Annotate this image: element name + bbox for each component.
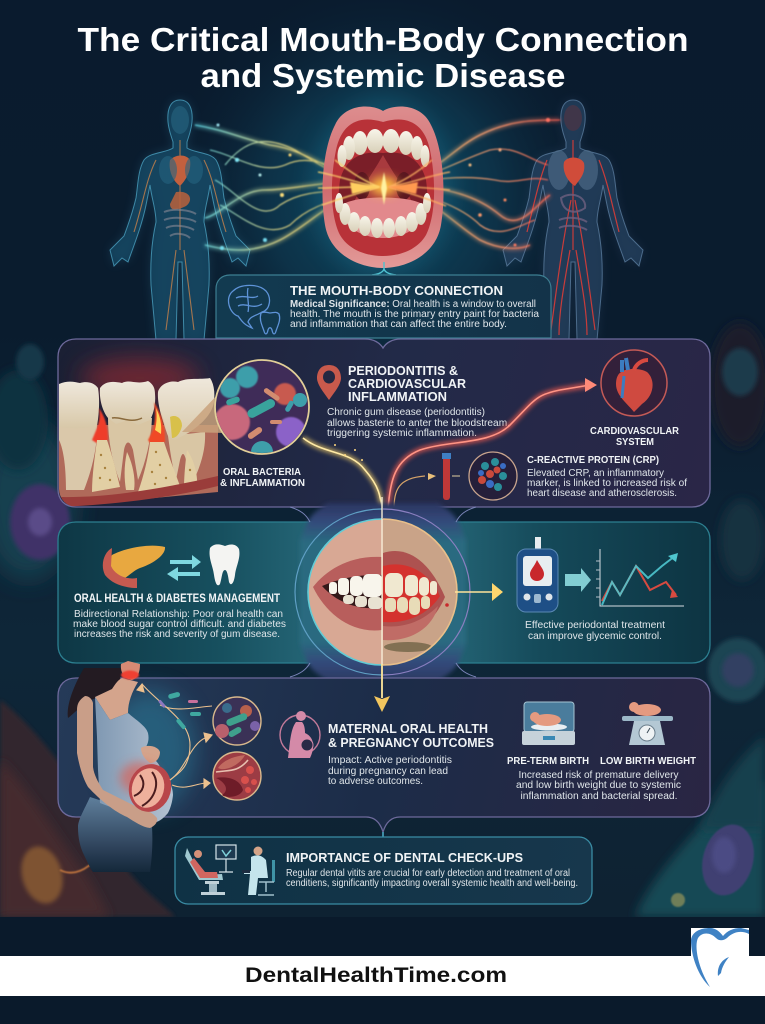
outcome text: Increased risk of premature delivery bbox=[518, 770, 678, 781]
outcome labels bbox=[507, 755, 697, 767]
label: oral bacteria: & INFLAMMATION bbox=[220, 477, 305, 489]
bone bbox=[92, 440, 197, 492]
teal arrow bbox=[565, 568, 591, 592]
outcome text: and low birth weight due to systemic bbox=[516, 780, 681, 791]
body text: Bidirectional Relationship: Poor oral health can bbox=[74, 609, 283, 620]
body text bbox=[327, 407, 510, 439]
label: oral bacteria: ORAL BACTERIA bbox=[223, 466, 301, 478]
body text bbox=[73, 609, 286, 640]
label: cardiovascular system: CARDIOVASCULAR bbox=[590, 425, 679, 437]
body text: make blood sugar control difficult. and diabetes bbox=[73, 619, 286, 630]
left lips bbox=[313, 557, 382, 630]
outcome labels: PRE-TERM BIRTH bbox=[507, 755, 589, 767]
connector: circle to glycemic panel arrow bbox=[455, 583, 503, 601]
CRP body text bbox=[527, 468, 687, 499]
label: cardiovascular system: SYSTEM bbox=[616, 436, 654, 448]
body text: cenditiens, significantly impacting overall systemic health and well-being. bbox=[286, 878, 578, 889]
location pin icon bbox=[317, 365, 341, 400]
footer text: DentalHealthTime.com bbox=[245, 964, 507, 987]
body text bbox=[525, 620, 665, 642]
heading: MATERNAL ORAL HEALTH bbox=[328, 722, 488, 736]
body text: allows basterie to anter the bloodstream, bbox=[327, 418, 510, 429]
heading: PERIODONTITIS & bbox=[348, 364, 458, 378]
center comparison: healthy vs diseased smile bbox=[290, 497, 476, 681]
crowns bbox=[59, 382, 99, 428]
panel: maternal oral health and pregnancy outcomes bbox=[58, 661, 710, 872]
pregnancy icon bbox=[280, 711, 320, 758]
CRP body text: Elevated CRP, an inflammatory bbox=[527, 468, 664, 479]
bacteria circle bbox=[213, 697, 261, 745]
glucose meter icon bbox=[517, 537, 558, 612]
infection path arrows bbox=[137, 684, 212, 788]
body text: to adverse outcomes. bbox=[328, 776, 423, 787]
lips bbox=[322, 107, 444, 268]
CRP heading: C-REACTIVE PROTEIN (CRP) bbox=[527, 454, 659, 466]
glow sparks bbox=[216, 118, 550, 250]
energy strands: left bbox=[195, 125, 378, 250]
outcome text: inflammation and bacterial spread. bbox=[520, 791, 678, 802]
bacteria specks bbox=[158, 692, 201, 730]
tooth icon bbox=[210, 544, 239, 585]
roots bbox=[59, 424, 97, 490]
right teeth bbox=[385, 573, 437, 597]
illustration: teeth with inflamed gums bbox=[59, 358, 218, 507]
CRP body text: heart disease and atherosclerosis. bbox=[527, 488, 677, 499]
heart icon bbox=[601, 350, 667, 416]
body text: Chronic gum disease (periodontitis) bbox=[327, 407, 485, 418]
logo: blue tooth bbox=[691, 928, 749, 987]
panel: glycemic control bbox=[426, 522, 710, 663]
body text: increases the risk and severity of gum disease. bbox=[74, 629, 280, 640]
CRP test tube icon bbox=[442, 453, 460, 500]
icon: brain and tooth bbox=[229, 285, 280, 334]
panel: importance of dental check-ups bbox=[175, 837, 592, 904]
heading: INFLAMMATION bbox=[348, 390, 447, 404]
pregnant woman illustration bbox=[68, 661, 195, 872]
body text: Regular dental vitits are crucial for early detection and treatment of oral bbox=[286, 868, 570, 879]
arrow: circle down to maternal panel bbox=[374, 664, 390, 712]
heading bbox=[348, 364, 466, 404]
incubator icon bbox=[522, 702, 575, 745]
right lips bbox=[383, 551, 445, 626]
body text bbox=[286, 868, 578, 889]
inflammation flames bbox=[92, 408, 108, 444]
body text: Effective periodontal treatment bbox=[525, 620, 665, 631]
heading bbox=[328, 722, 494, 750]
panel: oral health and diabetes management bbox=[58, 522, 340, 663]
connector: mouth to panel bbox=[372, 262, 396, 275]
body text: Medical Significance: Oral health is a window to overall bbox=[290, 299, 536, 310]
body text bbox=[328, 755, 452, 787]
lower teeth bbox=[335, 193, 431, 238]
placenta circle bbox=[213, 752, 261, 800]
double arrows bbox=[167, 555, 201, 581]
pancreas icon bbox=[103, 546, 165, 588]
open mouth illustration bbox=[313, 98, 453, 278]
title bbox=[78, 21, 688, 94]
dental chair icon bbox=[185, 845, 275, 895]
human figure: right bbox=[503, 100, 643, 340]
flow arrows: bacteria and inflammation bbox=[303, 378, 597, 520]
panel: the mouth-body connection bbox=[216, 275, 551, 338]
gum base bbox=[59, 425, 218, 507]
body text: Impact: Active periodontitis bbox=[328, 755, 452, 766]
line chart bbox=[596, 549, 684, 606]
outcome labels: LOW BIRTH WEIGHT bbox=[600, 755, 697, 767]
footer band bbox=[0, 917, 765, 1024]
CRP body text: marker, is linked to increased risk of bbox=[527, 478, 687, 489]
title: The Critical Mouth-Body Connection bbox=[78, 21, 688, 58]
heading: THE MOUTH-BODY CONNECTION bbox=[290, 283, 503, 298]
outcome text bbox=[516, 770, 681, 802]
body text bbox=[290, 299, 539, 330]
title: and Systemic Disease bbox=[200, 57, 566, 94]
connector: maternal panel to check-ups bbox=[382, 832, 384, 838]
body text: and inflammation that can affect the entire body. bbox=[290, 319, 507, 330]
human figure: left bbox=[110, 100, 250, 340]
heading: & PREGNANCY OUTCOMES bbox=[328, 736, 494, 750]
callout wedge bbox=[182, 390, 226, 433]
heading: IMPORTANCE OF DENTAL CHECK-UPS bbox=[286, 851, 523, 865]
energy strands: right bbox=[392, 120, 560, 248]
scale icon bbox=[622, 702, 673, 745]
body text: triggering systemic inflammation. bbox=[327, 428, 477, 439]
heading: ORAL HEALTH & DIABETES MANAGEMENT bbox=[74, 593, 280, 605]
body text: health. The mouth is the primary entry paint for bacteria bbox=[290, 309, 539, 320]
panel: periodontitis and cardiovascular inflammation bbox=[58, 339, 710, 507]
heading: CARDIOVASCULAR bbox=[348, 377, 466, 391]
CRP molecule icon bbox=[469, 452, 517, 500]
body text: during pregnancy can lead bbox=[328, 766, 448, 777]
left teeth bbox=[329, 574, 382, 597]
label: cardiovascular system bbox=[590, 425, 679, 448]
label: oral bacteria bbox=[220, 466, 305, 489]
body text: can improve glycemic control. bbox=[528, 631, 662, 642]
bacteria magnifier bbox=[214, 360, 309, 463]
upper teeth bbox=[338, 129, 430, 167]
